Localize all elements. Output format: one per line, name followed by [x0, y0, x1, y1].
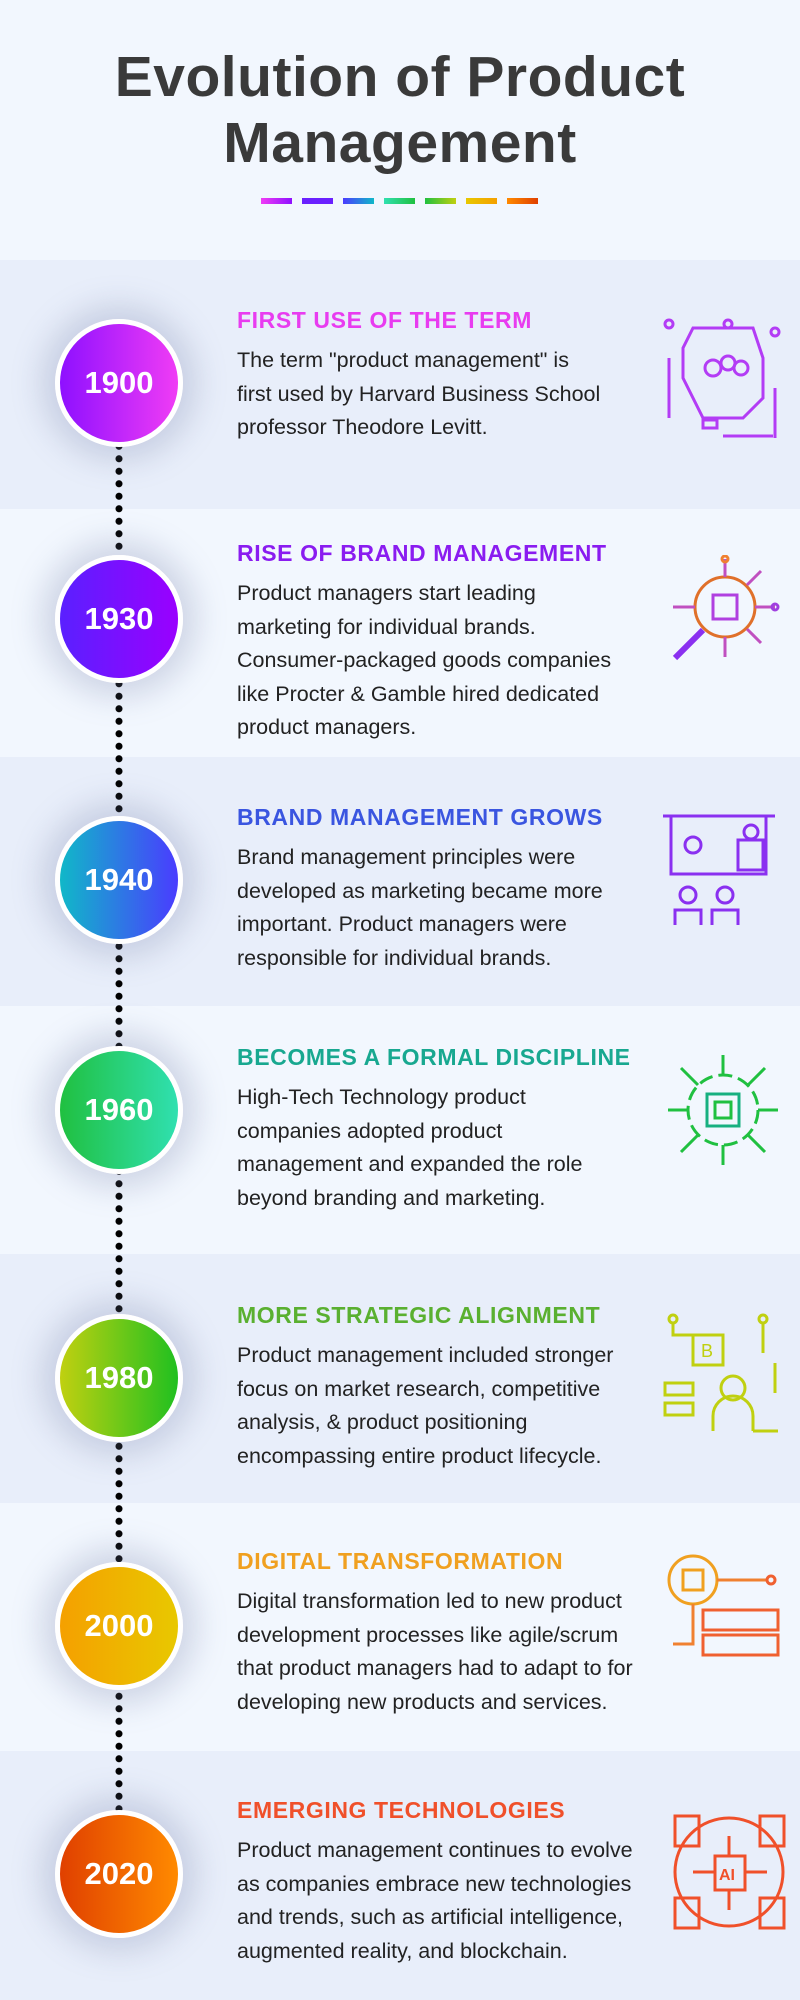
text 1900: professor Theodore Levitt. — [237, 415, 488, 439]
text 1900: The term "product management" is — [237, 348, 569, 372]
circle 2020: 2020 — [85, 1856, 153, 1891]
icon: AI chip: AI — [719, 1867, 735, 1884]
timeline dotted line — [115, 440, 123, 1830]
text 2020: EMERGING TECHNOLOGIES — [237, 1797, 565, 1823]
icon: gear chip — [668, 1055, 778, 1165]
text 1980 — [237, 1302, 614, 1468]
text 1960: management and expanded the role — [237, 1152, 582, 1176]
circle 1980 — [55, 1314, 183, 1442]
text 1940: BRAND MANAGEMENT GROWS — [237, 804, 603, 830]
circle 1900 — [55, 319, 183, 447]
icon: presentation robot — [663, 814, 775, 925]
text 2000: developing new products and services. — [237, 1690, 608, 1714]
text 2000: that product managers had to adapt to for — [237, 1656, 633, 1680]
circle 1930 — [55, 555, 183, 683]
circle 2020 — [55, 1810, 183, 1938]
text 1900: FIRST USE OF THE TERM — [237, 307, 532, 333]
title: Evolution of Product — [115, 45, 685, 109]
text 1960: High-Tech Technology product — [237, 1085, 526, 1109]
text 2000: DIGITAL TRANSFORMATION — [237, 1548, 563, 1574]
title — [115, 45, 685, 175]
text 1960 — [237, 1044, 631, 1210]
text 1960: BECOMES A FORMAL DISCIPLINE — [237, 1044, 631, 1070]
text 2020: augmented reality, and blockchain. — [237, 1938, 568, 1962]
circle 1940: 1940 — [85, 862, 153, 897]
icon: strategy person — [664, 1314, 778, 1432]
text 1930: like Procter & Gamble hired dedicated — [237, 682, 599, 706]
text 1980: focus on market research, competitive — [237, 1376, 600, 1400]
text 1930: product managers. — [237, 715, 416, 739]
text 1900: first used by Harvard Business School — [237, 382, 600, 406]
circle 1930: 1930 — [85, 601, 153, 636]
circle 1940 — [55, 816, 183, 944]
text 2020: as companies embrace new technologies — [237, 1872, 631, 1896]
text 1980: MORE STRATEGIC ALIGNMENT — [237, 1302, 600, 1328]
text 1980: encompassing entire product lifecycle. — [237, 1444, 602, 1468]
icon: AI chip — [674, 1814, 786, 1930]
color bars — [261, 198, 538, 204]
text 1940: responsible for individual brands. — [237, 946, 551, 970]
text 2000: development processes like agile/scrum — [237, 1622, 618, 1646]
text 1930: Consumer-packaged goods companies — [237, 648, 611, 672]
circle 2000: 2000 — [85, 1608, 153, 1643]
text 1930: marketing for individual brands. — [237, 614, 536, 638]
circle 1980: 1980 — [85, 1360, 153, 1395]
circle 1960 — [55, 1046, 183, 1174]
text 1900 — [237, 307, 600, 439]
text 1940: Brand management principles were — [237, 845, 575, 869]
text 2020: and trends, such as artificial intelligence, — [237, 1905, 623, 1929]
text 1960: companies adopted product — [237, 1118, 502, 1142]
text 1940: developed as marketing became more — [237, 878, 603, 902]
icon: strategy person: B — [701, 1341, 713, 1361]
icon: chip server — [668, 1554, 780, 1656]
text 1980: analysis, & product positioning — [237, 1410, 527, 1434]
text 1940 — [237, 804, 603, 970]
text 2020 — [237, 1797, 633, 1962]
text 2000: Digital transformation led to new product — [237, 1589, 622, 1613]
circle 2000 — [55, 1562, 183, 1690]
text 2000 — [237, 1548, 633, 1714]
text 1930: RISE OF BRAND MANAGEMENT — [237, 540, 607, 566]
text 1940: important. Product managers were — [237, 912, 567, 936]
title: Management — [223, 111, 577, 175]
text 1930 — [237, 540, 611, 739]
icon: magnifier chip — [672, 555, 780, 660]
icon: robot hand — [664, 318, 780, 438]
text 1930: Product managers start leading — [237, 581, 536, 605]
text 1980: Product management included stronger — [237, 1343, 613, 1367]
circle 1960: 1960 — [85, 1092, 153, 1127]
text 2020: Product management continues to evolve — [237, 1838, 633, 1862]
circle 1900: 1900 — [85, 365, 153, 400]
text 1960: beyond branding and marketing. — [237, 1186, 545, 1210]
